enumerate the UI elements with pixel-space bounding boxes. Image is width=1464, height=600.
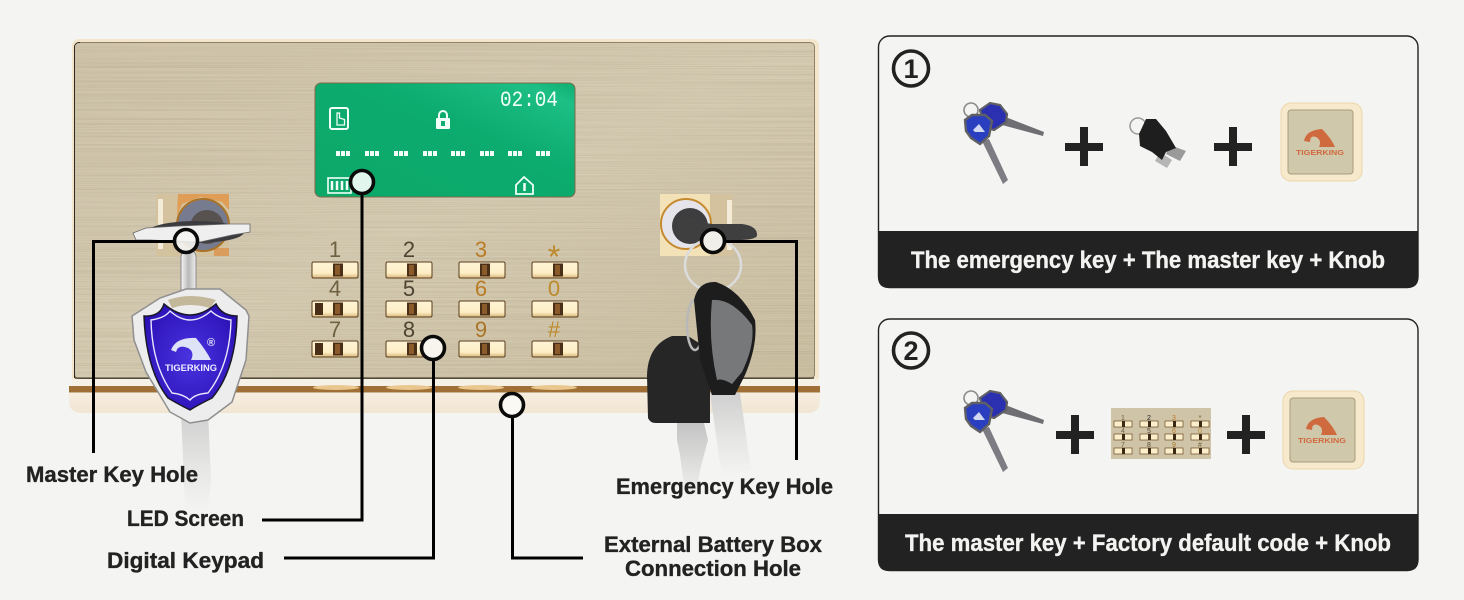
key head (133, 224, 250, 242)
icon: master keys (1130, 118, 1186, 168)
icon: plus (1065, 127, 1103, 166)
panel frame (72, 39, 819, 385)
black key fob (647, 336, 710, 423)
keypad digits: 2 (403, 237, 415, 262)
keypad digits: 0 (548, 276, 560, 301)
keypad digits: 4 (329, 276, 341, 301)
emergency keys (647, 217, 757, 500)
keypad digits: 7 (329, 317, 341, 342)
master key lock (156, 194, 229, 256)
callout: LED screen (262, 170, 374, 520)
safe control panel (69, 39, 820, 413)
grey teardrop head (694, 282, 756, 395)
keypad digits: * (548, 239, 560, 275)
icon: keypad: 4 (1121, 428, 1125, 435)
caption: The emergency key + The master key + Knob (911, 247, 1385, 274)
keypad digits: 9 (475, 317, 487, 342)
black key blade (677, 423, 708, 500)
label: digital keypad: Digital Keypad (107, 548, 264, 573)
icon: plus (1227, 415, 1265, 454)
icon: keypad: 0 (1198, 428, 1202, 435)
master key with shield fob (132, 221, 250, 512)
caption bar (878, 231, 1418, 288)
label: master key hole: Master Key Hole (26, 462, 198, 487)
callout: master key hole (94, 230, 198, 453)
icon: keypad (1111, 408, 1211, 459)
icon: battery (328, 178, 351, 193)
icon: keypad: 3 (1172, 415, 1176, 422)
second key ring (687, 300, 703, 350)
keypad digits: 5 (403, 276, 415, 301)
keypad buttons (312, 262, 578, 357)
panel: option 1 (878, 36, 1418, 288)
label: LED screen: LED Screen (127, 506, 244, 531)
icon: keypad: # (1198, 442, 1202, 449)
label: emergency key hole: Emergency Key Hole (616, 474, 833, 499)
number badge: 2 (903, 336, 919, 366)
callout: battery connection hole (500, 394, 583, 558)
key bow shadow (148, 221, 244, 243)
icon: emergency keys (964, 103, 1044, 184)
registered mark: ® (207, 337, 215, 349)
emergency key lock (660, 194, 733, 256)
callout: emergency key hole (702, 230, 796, 460)
caption bar (878, 514, 1418, 571)
icon: knob: TIGERKING (1298, 436, 1346, 445)
number badge: 1 (903, 54, 919, 84)
panel: option 2 (878, 319, 1418, 571)
key ring (685, 239, 741, 291)
number badge (894, 51, 928, 86)
brand: TIGERKING (165, 363, 217, 374)
icon: touch (330, 108, 348, 129)
icon: keypad: 9 (1172, 442, 1176, 449)
label: external battery box connection hole: External Battery Box (604, 532, 823, 557)
label: external battery box connection hole (604, 532, 823, 581)
keypad digits: 8 (403, 317, 415, 342)
icon: knob (1283, 391, 1364, 469)
icon: knob: TIGERKING (1296, 148, 1344, 157)
keypad digits: # (548, 317, 561, 342)
keypad digits (329, 237, 561, 342)
key head in lock (676, 217, 757, 241)
fob (132, 289, 249, 423)
keypad digits: 6 (475, 276, 487, 301)
silver blade (710, 393, 751, 478)
keypad digits: 1 (329, 237, 341, 262)
digital keypad (312, 237, 578, 357)
segment dashes (336, 151, 550, 156)
clock: 02:04 (500, 88, 558, 113)
icon: plus (1214, 127, 1252, 166)
base ledge (69, 379, 820, 413)
brushed metal plate (75, 43, 814, 379)
LED screen (315, 83, 575, 197)
number badge (894, 333, 928, 368)
callout: digital keypad (284, 336, 444, 558)
keypad digits: 3 (475, 237, 487, 262)
icon: padlock (436, 111, 450, 129)
key ring link (181, 250, 196, 300)
icon: keypad: 2 (1147, 415, 1151, 422)
icon: keypad: 6 (1172, 428, 1176, 435)
key blade (181, 412, 211, 512)
label: external battery box connection hole: Connection Hole (625, 556, 801, 581)
icon: plus (1056, 415, 1094, 454)
icon: keypad: 1 (1121, 415, 1125, 422)
icon: keypad: 8 (1147, 442, 1151, 449)
icon: keypad: 5 (1147, 428, 1151, 435)
icon: master keys (964, 391, 1044, 472)
icon: bank (516, 177, 533, 194)
caption: The master key + Factory default code + Knob (905, 530, 1391, 557)
logo (171, 338, 211, 360)
icon: keypad: * (1199, 415, 1202, 422)
icon: knob (1281, 103, 1362, 181)
icon: keypad: 7 (1121, 442, 1125, 449)
